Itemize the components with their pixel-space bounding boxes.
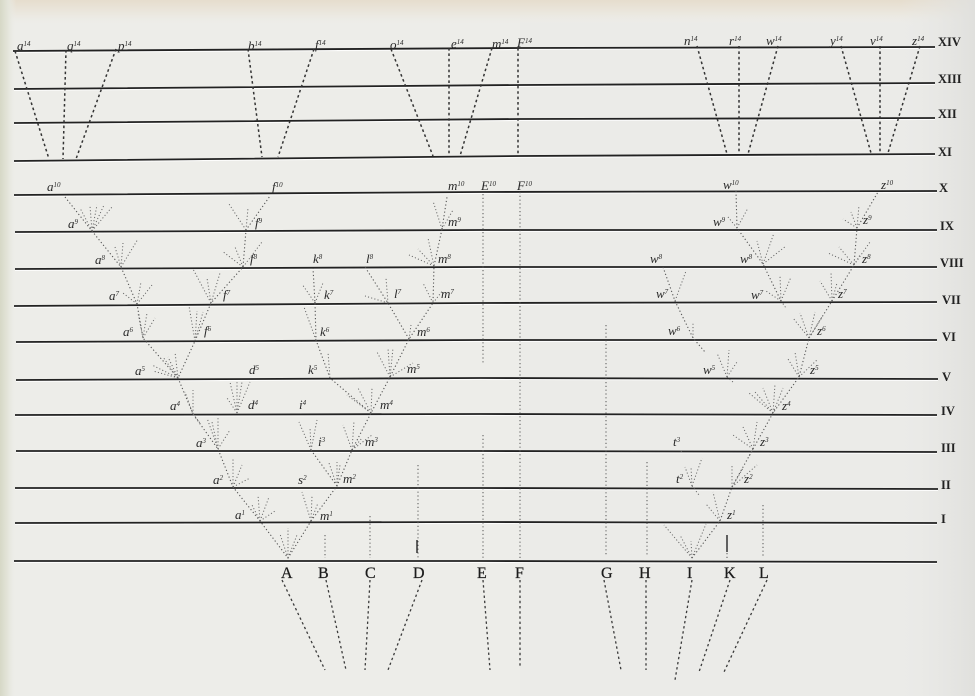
variety labels, right tree: 5 (815, 364, 819, 372)
variety labels, left and centre trees: 4 (176, 400, 180, 408)
variety labels, left and centre trees (47, 178, 532, 523)
variety labels, generation XIV: 14 (917, 35, 925, 43)
generation numerals I to XIV: IX (940, 219, 954, 233)
generation numerals I to XIV: XII (938, 107, 957, 121)
variety labels, right tree: w (668, 323, 677, 338)
variety labels, left and centre trees: a (235, 507, 242, 522)
variety labels, left and centre trees: i (299, 397, 303, 412)
variety labels, left and centre trees: 6 (130, 326, 134, 334)
variety labels, generation XIV: 14 (457, 38, 464, 46)
variety labels, right tree: 8 (867, 253, 871, 261)
variety labels, right tree: w (650, 251, 659, 266)
generation numerals I to XIV: XIII (938, 72, 962, 86)
right tree: species z branches (706, 205, 870, 521)
variety labels, generation XIV: v (870, 33, 876, 48)
variety labels, left and centre trees: s (298, 472, 303, 487)
variety labels, right tree: z (744, 471, 749, 486)
variety labels, left and centre trees: k (308, 362, 314, 377)
lower descent lines below species A to L (282, 580, 767, 680)
variety labels, left and centre trees: d (249, 362, 256, 377)
variety labels, left and centre trees: f (272, 179, 276, 194)
variety labels, right tree: 10 (732, 179, 739, 187)
variety labels, right tree (650, 177, 894, 522)
variety labels, right tree: 1 (732, 509, 736, 517)
variety labels, left and centre trees: 7 (450, 288, 454, 296)
variety labels, left and centre trees: 6 (326, 326, 330, 334)
variety labels, generation XIV: 14 (24, 40, 31, 48)
variety labels, left and centre trees: 8 (254, 253, 258, 261)
variety labels, left and centre trees: F (517, 178, 525, 193)
species labels A to L: C (365, 565, 376, 582)
variety labels, left and centre trees: l (366, 251, 370, 266)
variety labels, generation XIV: 14 (525, 37, 532, 45)
variety labels, left and centre trees: m (448, 178, 457, 193)
persistent vertical lineages (325, 192, 763, 558)
variety labels, right tree: z (881, 177, 886, 192)
variety labels, right tree: 2 (680, 473, 684, 481)
variety labels, right tree: 8 (749, 253, 753, 261)
variety labels, left and centre trees: 9 (74, 218, 78, 226)
variety labels, right tree: z (760, 434, 765, 449)
variety labels, left and centre trees: 9 (259, 217, 263, 225)
variety labels, left and centre trees: 3 (202, 437, 206, 445)
variety labels, left and centre trees: 5 (314, 364, 318, 372)
variety labels, left and centre trees: f (250, 251, 254, 266)
variety labels, generation XIV: z (912, 33, 917, 48)
variety labels, generation XIV: a (17, 38, 24, 53)
variety labels, left and centre trees: a (196, 435, 202, 450)
variety labels, left and centre trees: m (380, 397, 389, 412)
upper descent lines XI to XIV (15, 46, 920, 159)
variety labels, right tree: 8 (659, 253, 663, 261)
variety labels, left and centre trees: m (407, 361, 416, 376)
variety labels, generation XIV: 14 (775, 35, 782, 43)
variety labels, left and centre trees: 5 (256, 364, 260, 372)
variety labels, left and centre trees: 4 (254, 399, 258, 407)
variety labels, right tree: w (703, 362, 712, 377)
variety labels, generation XIV: b (248, 38, 254, 53)
variety labels, generation XIV (17, 33, 925, 53)
variety labels, left and centre trees: 10 (276, 181, 283, 189)
species labels A to L: B (318, 565, 329, 582)
variety labels, left and centre trees: 4 (389, 399, 393, 407)
variety labels, left and centre trees: 3 (373, 436, 378, 444)
variety labels, left and centre trees: 2 (352, 473, 356, 481)
variety labels, generation XIV: 14 (254, 40, 262, 48)
variety labels, right tree: z (782, 398, 787, 413)
variety labels, generation XIV: 14 (501, 38, 509, 46)
variety labels, left and centre trees: 8 (319, 253, 323, 261)
variety labels, right tree: 6 (822, 325, 826, 333)
variety labels, left and centre trees: m (320, 508, 329, 523)
variety labels, left and centre trees: d (248, 397, 254, 412)
generation numerals I to XIV: II (941, 478, 951, 492)
species labels A to L: A (281, 565, 293, 582)
variety labels, left and centre trees: i (318, 434, 322, 449)
variety labels, left and centre trees: 4 (303, 399, 307, 407)
variety labels, left and centre trees: 2 (220, 474, 224, 482)
variety labels, generation XIV: 14 (124, 40, 132, 48)
variety labels, generation XIV: 14 (690, 35, 698, 43)
left tree: species a branches (65, 197, 311, 558)
variety labels, left and centre trees: k (313, 251, 319, 266)
variety labels, generation XIV: r (729, 33, 734, 48)
variety labels, left and centre trees: 9 (457, 216, 461, 224)
variety labels, left and centre trees: f (223, 287, 227, 302)
variety labels, left and centre trees: f (204, 323, 208, 338)
right tree: species w and t branches (663, 191, 878, 558)
variety labels, left and centre trees: E (481, 178, 489, 193)
generation numerals I to XIV: III (941, 441, 956, 455)
species labels A to L: G (601, 565, 613, 582)
species labels A to L: D (413, 565, 425, 582)
variety labels, left and centre trees: a (95, 252, 102, 267)
generation numerals I to XIV: XIV (938, 35, 961, 49)
variety labels, left and centre trees: a (109, 288, 116, 303)
variety labels, left and centre trees: m (448, 214, 457, 229)
variety labels, generation XIV: 14 (74, 40, 81, 48)
generation numerals I to XIV (938, 35, 964, 526)
variety labels, right tree: 4 (787, 400, 791, 408)
species labels A to L (281, 565, 769, 582)
variety labels, left and centre trees: m (438, 251, 447, 266)
generation numerals I to XIV: VIII (940, 256, 964, 270)
variety labels, right tree: w (751, 287, 760, 302)
variety labels, left and centre trees: a (123, 324, 130, 339)
species labels A to L: E (477, 565, 487, 582)
variety labels, left and centre trees: m (365, 434, 374, 449)
species labels A to L: I (687, 565, 692, 582)
variety labels, right tree: z (862, 251, 867, 266)
generation numerals I to XIV: XI (938, 145, 952, 159)
variety labels, left and centre trees: k (324, 287, 330, 302)
generation lines (13, 47, 938, 563)
variety labels, left and centre trees: m (441, 286, 450, 301)
variety labels, left and centre trees: 2 (303, 474, 307, 482)
variety labels, left and centre trees: a (47, 179, 54, 194)
species labels A to L: K (724, 565, 736, 582)
variety labels, right tree: 2 (749, 473, 753, 481)
variety labels, generation XIV: q (67, 38, 74, 53)
variety labels, generation XIV: p (118, 38, 124, 53)
variety labels, left and centre trees: 7 (398, 288, 402, 296)
variety labels, right tree: z (727, 507, 732, 522)
left tree: species f branches (189, 196, 270, 341)
variety labels, generation XIV: w (766, 33, 775, 48)
variety labels, right tree: w (723, 177, 732, 192)
variety labels, generation XIV: y (830, 33, 836, 48)
variety labels, left and centre trees: 1 (329, 510, 333, 518)
species labels A to L: F (515, 565, 524, 582)
variety labels, generation XIV: F (517, 35, 525, 50)
variety labels, right tree: 5 (712, 364, 716, 372)
variety labels, right tree: 7 (843, 288, 847, 296)
variety labels, left and centre trees: f (255, 215, 259, 230)
variety labels, left and centre trees: 7 (227, 289, 231, 297)
variety labels, right tree: w (713, 214, 722, 229)
variety labels, generation XIV: o (390, 37, 396, 52)
variety labels, right tree: 3 (676, 436, 681, 444)
variety labels, right tree: 10 (886, 179, 894, 187)
variety labels, right tree: w (740, 251, 749, 266)
centre tree: species m, i, k, l branches (299, 197, 453, 521)
variety labels, right tree: 6 (677, 325, 681, 333)
variety labels, generation XIV: m (492, 36, 501, 51)
variety labels, left and centre trees: a (213, 472, 220, 487)
variety labels, left and centre trees: k (320, 324, 326, 339)
variety labels, right tree: z (817, 323, 822, 338)
species labels A to L: H (639, 565, 651, 582)
variety labels, left and centre trees: 8 (102, 254, 106, 262)
variety labels, left and centre trees: a (135, 363, 142, 378)
variety labels, left and centre trees: a (170, 398, 176, 413)
variety labels, right tree: z (810, 362, 815, 377)
variety labels, right tree: z (838, 286, 843, 301)
variety labels, left and centre trees: 5 (416, 363, 420, 371)
variety labels, generation XIV: 14 (836, 35, 843, 43)
variety labels, left and centre trees: 10 (489, 180, 496, 188)
variety labels, generation XIV: 14 (876, 35, 883, 43)
variety labels, left and centre trees: 6 (426, 326, 430, 334)
variety labels, right tree: t (673, 434, 677, 449)
variety labels, left and centre trees: 8 (447, 253, 451, 261)
variety labels, left and centre trees: l (394, 286, 398, 301)
variety labels, right tree: 9 (868, 214, 872, 222)
variety labels, left and centre trees: m (343, 471, 352, 486)
variety labels, right tree: w (656, 286, 665, 301)
variety labels, left and centre trees: 5 (142, 365, 146, 373)
variety labels, left and centre trees: 10 (457, 180, 465, 188)
variety labels, left and centre trees: m (417, 324, 426, 339)
generation numerals I to XIV: X (939, 181, 948, 195)
variety labels, generation XIV: 14 (319, 39, 326, 47)
variety labels, left and centre trees: 10 (525, 180, 532, 188)
generation numerals I to XIV: V (942, 370, 951, 384)
generation numerals I to XIV: I (941, 512, 946, 526)
variety labels, left and centre trees: a (68, 216, 74, 231)
variety labels, generation XIV: 14 (734, 35, 742, 43)
variety labels, right tree: 7 (760, 289, 764, 297)
variety labels, left and centre trees: 3 (321, 436, 326, 444)
variety labels, right tree: 3 (764, 436, 769, 444)
variety labels, left and centre trees: 1 (242, 509, 245, 517)
variety labels, left and centre trees: 8 (370, 253, 374, 261)
variety labels, left and centre trees: 7 (330, 289, 334, 297)
variety labels, generation XIV: n (684, 33, 690, 48)
variety labels, left and centre trees: 6 (208, 325, 212, 333)
variety labels, right tree: 7 (665, 288, 669, 296)
variety labels, left and centre trees: 10 (54, 181, 61, 189)
variety labels, left and centre trees: 7 (116, 290, 120, 298)
variety labels, right tree: z (863, 212, 868, 227)
variety labels, right tree: 9 (722, 216, 726, 224)
variety labels, generation XIV: f (315, 37, 319, 52)
variety labels, right tree: t (676, 471, 680, 486)
generation numerals I to XIV: VII (942, 293, 961, 307)
generation numerals I to XIV: VI (942, 330, 956, 344)
generation numerals I to XIV: IV (941, 404, 955, 418)
variety labels, generation XIV: e (451, 36, 457, 51)
species labels A to L: L (759, 565, 769, 582)
variety labels, generation XIV: 14 (396, 39, 404, 47)
